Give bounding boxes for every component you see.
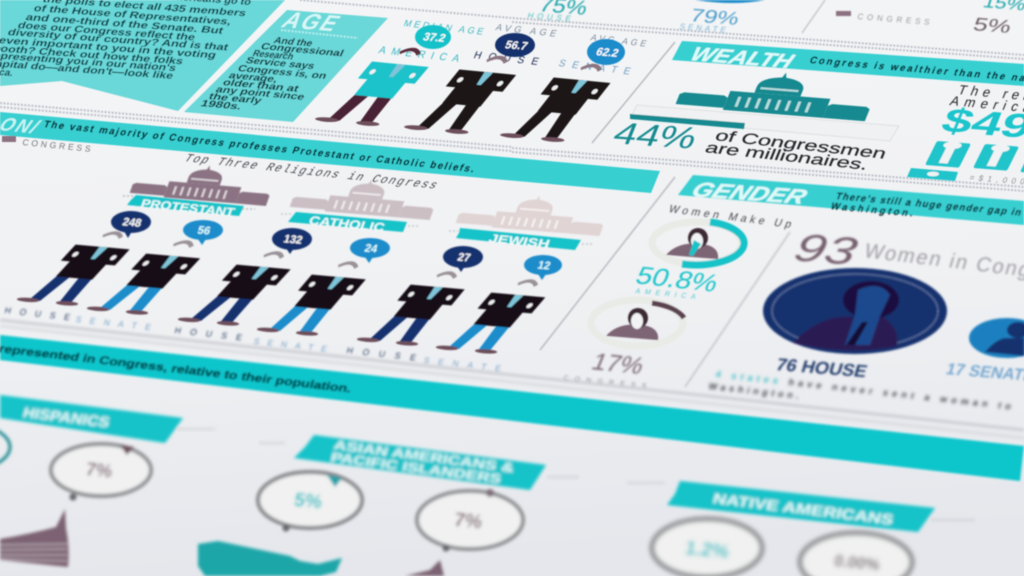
house and senate labels: HOUSE: [3, 305, 72, 322]
house and senate labels: SENATE: [422, 355, 503, 373]
stat: 17% congress: CONGRESS: [563, 374, 647, 390]
jewish group: JEWISH: [487, 231, 552, 251]
intro text block: diversity of our country? And is that: [6, 27, 231, 53]
panel: religion chart: [15, 160, 612, 354]
catholic group: [281, 174, 442, 234]
section edge lines: [0, 320, 1024, 438]
age text: [199, 35, 345, 112]
age text: Service says: [244, 55, 316, 72]
age text: And the: [272, 35, 314, 49]
icon: money stacks: [907, 140, 1024, 181]
catholic group: CATHOLIC: [307, 213, 387, 234]
gender heading: GENDER: [688, 179, 811, 209]
figure: protestant house: [15, 211, 151, 306]
stat: 50.8% america: AMERICA: [634, 287, 697, 301]
ribbon: hispanics: [0, 395, 183, 443]
top statistics row: [526, 0, 1024, 37]
age text: Congressional: [259, 41, 345, 59]
icon: capitol teal: [675, 65, 881, 121]
dotted section dividers: [0, 0, 1024, 191]
millionaires text: are millionaires.: [702, 140, 871, 174]
figure: jewish senate: [434, 255, 562, 354]
intro text block: does our Congress reflect the: [16, 20, 197, 43]
religion bar text: The vast majority of Congress professes Protestant or Catholic beliefs.: [42, 119, 476, 175]
house age group: [403, 22, 558, 135]
figure: jewish house: [355, 246, 483, 346]
america age group: MEDIAN AGE: [402, 18, 485, 37]
stat: 93 women: 93: [789, 227, 862, 274]
states never sent a woman note: Washington.: [707, 381, 800, 401]
intro text block: [0, 0, 253, 82]
figure: catholic house: 132: [282, 233, 304, 247]
age teal panel: [184, 10, 388, 122]
gender heading bar: [678, 175, 1024, 225]
panel: asian americans: ASIAN AMERICANS &: [332, 437, 516, 475]
house and senate labels: SENATE: [252, 336, 329, 354]
protestant group: [123, 160, 278, 219]
age heading: AGE: [278, 7, 344, 36]
house age group: 56.7: [503, 39, 529, 53]
circle: 7% hispanics congress: 7%: [84, 459, 114, 481]
icon: capitol dome bottom left: [0, 509, 69, 567]
gender bar text: Washington.: [829, 201, 915, 219]
circle: 0.00% congress: [800, 533, 912, 576]
religion chart title: Top Three Religions in Congress: [182, 152, 440, 192]
women make up label: Women Make Up: [667, 203, 793, 231]
stat: 79% senate: 79%: [688, 4, 742, 29]
panel: native americans: [628, 481, 975, 532]
age text: 1980s.: [199, 98, 243, 112]
intro text block: and one-third of the Senate. But: [24, 12, 226, 37]
stat: 17% congress: [563, 349, 648, 390]
millionaires text: of Congressmen: [712, 128, 889, 163]
age text: Congress is, on: [236, 63, 329, 82]
america age group: AMERICA: [377, 45, 461, 65]
panel: asian americans: [198, 435, 580, 576]
age figures: [313, 18, 648, 143]
figure: jewish senate: 12: [536, 260, 552, 272]
bottom teal band: [0, 335, 1024, 481]
figure: catholic house: [176, 228, 312, 326]
age dotted rule: [281, 30, 358, 38]
circles: native americans: [652, 519, 912, 576]
intro text block: of the House of Representatives,: [32, 3, 233, 28]
figure: catholic senate: [255, 238, 390, 336]
house and senate labels: HOUSE: [345, 345, 418, 363]
states never sent a woman note: 4 states have never sent a woman to: [714, 369, 1013, 411]
donut: america 50.8%: [652, 222, 744, 265]
legend: congress: CONGRESS: [857, 12, 931, 27]
gender stats and portraits: [563, 227, 1024, 390]
stat: 50.8% america: 50.8%: [632, 262, 722, 298]
senate age group: 62.2: [594, 46, 620, 60]
portrait: 76 house: [763, 268, 947, 354]
senate age group: [499, 32, 648, 143]
circle: 1.2% america: 1.2%: [683, 538, 731, 563]
intro text block: even important to you in the voting: [0, 35, 218, 61]
age text: average,: [227, 70, 279, 85]
panel: wealth: [592, 41, 1024, 186]
senate age group: AVG AGE: [589, 32, 648, 49]
house and senate labels: [3, 305, 503, 373]
panel: age: [184, 7, 388, 122]
partial circle left: [0, 423, 10, 471]
senate age group: SENATE: [557, 58, 632, 77]
protestant group: PROTESTANT: [139, 196, 238, 219]
panel: gender: [540, 175, 1024, 350]
stat: 79% senate: [678, 0, 765, 35]
intro teal shape: [0, 0, 285, 111]
circle: 7% congress: 7%: [452, 510, 484, 533]
stat: 75% house: [526, 0, 590, 23]
figure: catholic senate: 24: [363, 243, 379, 255]
circle: 7% congress: [417, 489, 523, 552]
legend: congress left: CONGRESS: [22, 137, 92, 154]
house and senate labels: SENATE: [74, 314, 153, 332]
ribbon: asian americans and pacific islanders: [294, 435, 546, 490]
panel: intro text: [0, 0, 285, 111]
panel: representation band: [0, 335, 1024, 481]
figure: protestant house: 248: [121, 216, 143, 230]
stat: 5% and 15%: 5%: [971, 13, 1014, 37]
religion teal band: [0, 112, 660, 193]
real america income: [936, 82, 1024, 154]
circle: 0.00% congress: 0.00%: [833, 552, 881, 574]
stat: 75% house: HOUSE: [526, 11, 573, 23]
stat: 93 women: [789, 227, 1024, 287]
america age group: [313, 18, 485, 127]
icon: us map: [198, 541, 342, 576]
stat: 76 house: 76 HOUSE: [774, 354, 870, 381]
jewish group: [449, 190, 612, 251]
figure: protestant senate: 56: [196, 225, 212, 237]
icon: capitol spire: [405, 560, 444, 576]
portrait: 17 senate: [969, 318, 1024, 358]
circle: 7% hispanics congress: [51, 444, 151, 500]
america age group: 37.2: [421, 31, 447, 45]
band text: represented in Congress, relative to their population.: [0, 343, 353, 395]
donut: congress 17%: [591, 300, 684, 346]
figure: jewish house: 27: [456, 252, 472, 264]
panel: native americans: NATIVE AMERICANS: [711, 491, 895, 529]
wealth heading: WEALTH: [687, 44, 798, 73]
circle: 5% america: 5%: [292, 490, 324, 513]
gender bar text: There's still a huge gender gap in: [834, 191, 1023, 219]
stat: 17% congress: 17%: [588, 349, 648, 380]
panel: hispanics: [0, 395, 215, 500]
age text: Research: [251, 48, 296, 62]
circle: 5% america: [258, 472, 362, 532]
stat: 44%: 44%: [608, 116, 703, 155]
millionaires text: [702, 128, 889, 174]
stat: 79% senate: SENATE: [678, 22, 728, 35]
panel: asian americans: PACIFIC ISLANDERS: [329, 449, 503, 486]
circle: 1.2% america: [652, 519, 762, 576]
panel: religion heading bar: [0, 112, 660, 193]
house and senate labels: HOUSE: [173, 325, 244, 342]
wealth heading bar: [672, 41, 1024, 86]
house age group: AVG AGE: [494, 22, 558, 39]
age text: older than at: [221, 77, 302, 95]
ribbon: native americans: [667, 481, 935, 532]
stat: 5% and 15%: [971, 0, 1024, 37]
panel: hispanics: HISPANICS: [21, 405, 112, 431]
age text: the early: [207, 91, 264, 107]
progress bar: 44 percent: [630, 105, 899, 141]
figure: protestant senate: [85, 220, 223, 315]
age text: any point since: [214, 84, 306, 103]
house age group: HOUSE: [472, 50, 540, 68]
